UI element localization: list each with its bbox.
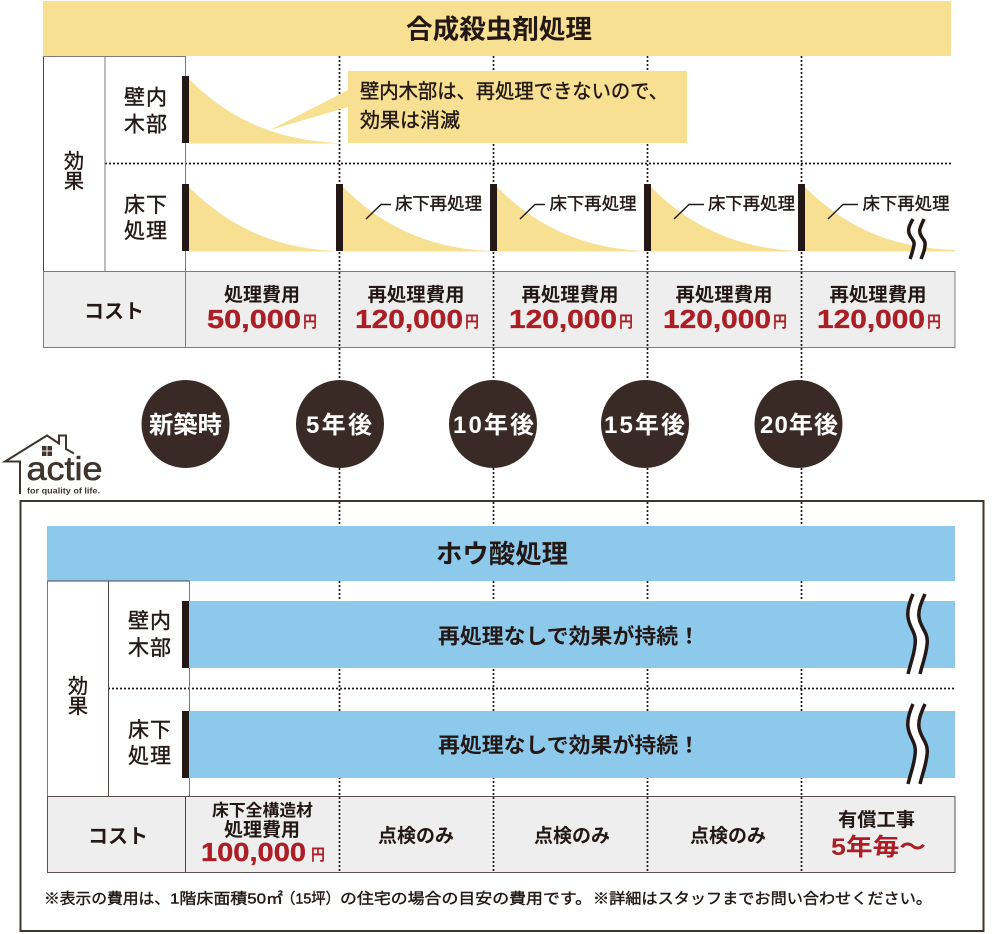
bar: under floor lasting effect [182,711,955,778]
timeline dotted guides [105,56,955,872]
panel frame [20,501,984,931]
cost: retreatment at 10 years [509,284,633,334]
cost: retreatment at 15 years [663,284,787,334]
label: wall wood: 壁内 [124,86,167,110]
cost: initial treatment: 処理費用 [224,284,300,306]
cost: retreatment at 5 years: 円 [465,314,479,331]
icon: break mark lower [908,704,927,784]
milestone: 5 years [296,380,384,468]
cost: retreatment at 5 years: 120,000 [355,304,463,334]
cost: paid work every 5 years: 有償工事 [838,809,915,831]
cost: initial treatment [201,800,325,867]
logo: actie: actie [26,450,102,487]
label: effect [68,675,88,718]
label: wall wood: 木部 [124,114,167,136]
footnote: の住宅の場合の目安の費用です。 [340,890,592,908]
label: wall wood: 木部 [128,637,171,660]
cost: retreatment at 10 years: 円 [619,314,633,331]
bar: under floor lasting effect: 再処理なしで効果が持続！ [438,734,700,758]
cost: inspection only: 点検のみ [534,825,610,847]
label: retreatment at 15 years: 床下再処理 [708,194,795,214]
cost: initial treatment: 100,000 [201,837,306,867]
bar: wall wood lasting effect [182,601,955,668]
cost: retreatment at 20 years: 120,000 [817,304,925,334]
cost: retreatment at 20 years: 再処理費用 [830,284,926,306]
cost: initial treatment: 円 [311,847,325,864]
panel: boric acid treatment [20,501,984,931]
label: under floor treatment: 処理 [124,220,167,243]
milestone: new build: 新築時 [149,412,222,439]
cost: initial treatment [207,284,317,334]
label: effect: 効 [68,675,88,698]
milestone: 20 years [754,380,842,468]
label: under floor treatment [128,719,171,768]
milestone: 20 years: 20年後 [760,412,838,439]
cost: paid work every 5 years: 5年毎〜 [831,834,926,861]
footnote: ※表示の費用は、 [44,890,170,908]
label: wall wood [124,86,167,136]
icon: break mark [909,219,925,259]
panel: synthetic insecticide treatment [43,1,955,347]
footnote: ※詳細はスタッフまでお問い合わせください。 [593,890,932,908]
callout: wall wood cannot be retreated [270,71,687,143]
milestone: 10 years [449,380,537,468]
table frame: effect labels [48,581,190,872]
footnote: 1階床面積50㎡ [170,890,283,908]
milestone: 15 years: 15年後 [604,412,685,439]
label: retreatment at 5 years: 床下再処理 [395,194,482,214]
label: retreatment at 5 years [366,194,482,219]
label: cost: コスト [88,826,148,848]
milestone: 10 years: 10年後 [453,412,534,439]
table frame: effect labels [44,56,186,347]
heading band: boric acid treatment: ホウ酸処理 [436,539,568,569]
label: under floor treatment [124,194,167,243]
cost: retreatment at 15 years: 再処理費用 [676,284,772,306]
milestone: 5 years: 5年後 [306,412,372,439]
heading band: boric acid treatment [47,526,955,581]
cost: retreatment at 20 years: 円 [927,314,941,331]
timeline: milestones [142,380,842,468]
chart: wall wood effect decay [182,76,339,144]
cost: initial treatment: 床下全構造材 [212,800,313,820]
label: retreatment at 20 years: 床下再処理 [862,194,950,214]
bar: wall wood lasting effect: 再処理なしで効果が持続！ [438,624,700,648]
label: effect: 効 [64,150,84,173]
cost: retreatment at 15 years: 120,000 [663,304,771,334]
cost: initial treatment: 円 [303,314,317,331]
milestone: 15 years [601,380,689,468]
cost row background: boric acid treatment [48,796,955,872]
cost: retreatment at 15 years: 円 [773,314,787,331]
heading band: synthetic treatment: 合成殺虫剤処理 [406,14,592,44]
heading band: synthetic treatment [43,1,951,56]
label: effect [64,150,84,193]
cost row background: synthetic treatment [44,272,955,348]
callout: wall wood cannot be retreated: 効果は消滅 [360,109,460,132]
cost: retreatment at 20 years [817,284,941,334]
chart: under floor effect decay [182,184,955,252]
cost: retreatment at 10 years: 再処理費用 [522,284,618,306]
label: retreatment at 15 years [674,194,795,219]
cost: inspection only: 点検のみ [378,825,454,847]
label: under floor treatment: 処理 [128,745,171,768]
cost: retreatment at 5 years: 再処理費用 [368,284,464,306]
label: effect: 果 [68,696,88,718]
label: retreatment at 20 years [828,194,950,219]
label: under floor treatment: 床下 [124,194,167,217]
cost: initial treatment: 処理費用 [224,819,300,841]
label: retreatment at 10 years: 床下再処理 [550,194,636,214]
logo: actie: for quality of life. [27,486,100,496]
label: cost: コスト [84,301,144,323]
cost: paid work every 5 years [831,809,926,861]
callout: wall wood cannot be retreated: 壁内木部は、再処理できないので、 [360,80,668,103]
milestone: new build [142,380,230,468]
cost: retreatment at 10 years: 120,000 [509,304,617,334]
label: under floor treatment: 床下 [128,719,171,742]
cost: initial treatment: 50,000 [207,304,301,334]
label: wall wood: 壁内 [128,610,171,633]
footnote [44,890,932,908]
cost: inspection only: 点検のみ [690,825,766,847]
label: wall wood [128,610,171,660]
label: retreatment at 10 years [520,194,636,219]
icon: break mark upper [908,594,927,674]
cost: retreatment at 5 years [355,284,479,334]
logo: actie [5,436,102,496]
footnote: （15坪） [281,890,340,908]
label: effect: 果 [64,171,84,193]
